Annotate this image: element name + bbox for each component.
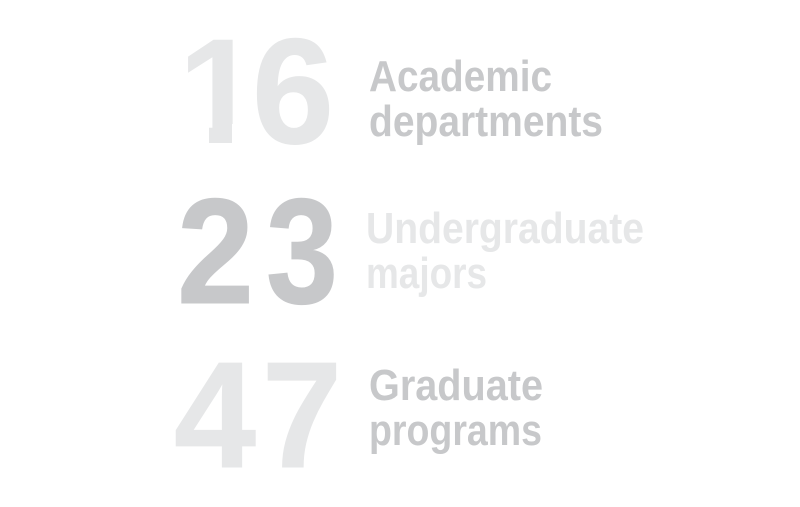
number: 47: 7 — [262, 330, 342, 499]
row: graduate programs — [174, 330, 543, 499]
label: Undergraduate majors: Undergraduate — [366, 204, 644, 253]
label: Academic departments: Academic — [369, 52, 552, 101]
number: 16: 1 — [178, 7, 260, 175]
label: Academic departments — [369, 52, 603, 146]
number: 23 — [177, 167, 338, 335]
number: 23: 2 — [177, 167, 254, 335]
label: Academic departments: departments — [369, 97, 603, 146]
label: Graduate programs — [369, 361, 543, 455]
label: Graduate programs: Graduate — [369, 361, 543, 410]
row: undergraduate majors — [177, 167, 644, 335]
row: academic departments — [170, 7, 603, 175]
label: Undergraduate majors — [366, 204, 644, 298]
number: 47: 4 — [174, 330, 256, 499]
number: 16 — [170, 7, 334, 175]
number: 47 — [174, 330, 342, 499]
number: 16: 6 — [252, 7, 334, 175]
label: Undergraduate majors: majors — [366, 249, 487, 298]
number: 23: 3 — [266, 167, 338, 335]
label: Graduate programs: programs — [369, 406, 542, 455]
